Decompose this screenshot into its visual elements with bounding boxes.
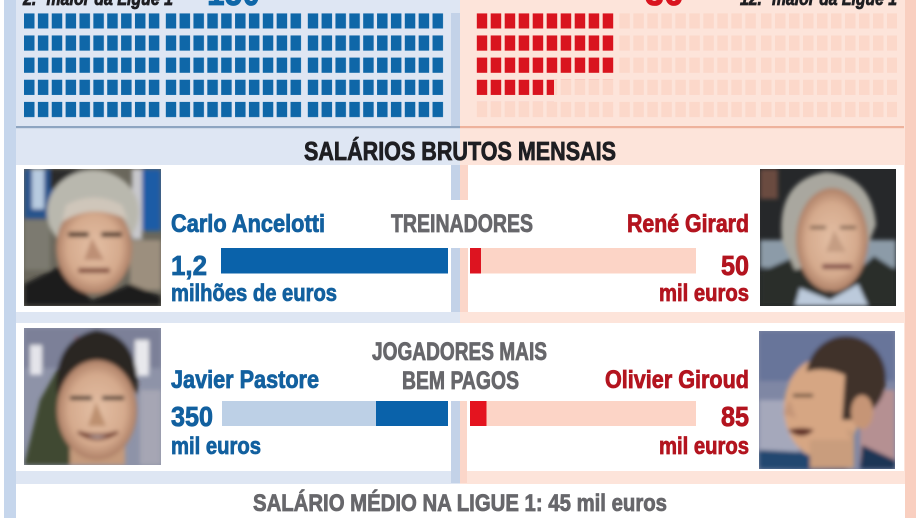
unit chart: left team, all squares filled: [24, 13, 445, 124]
category label: coaches: TREINADORES: [391, 210, 533, 238]
right player salary unit: mil euros: [659, 433, 749, 460]
photo: Olivier Giroud: [759, 331, 895, 470]
right coach name: René Girard: [627, 210, 749, 238]
section heading: SALÁRIOS BRUTOS MENSAIS: [304, 136, 616, 166]
right player salary value: 85: [721, 401, 749, 432]
category label: best-paid players: BEM PAGOS: [402, 367, 519, 395]
photo: Carlo Ancelotti: [24, 169, 161, 306]
right player bar: [470, 401, 696, 426]
right player name: Olivier Giroud: [605, 366, 749, 394]
left coach bar: [221, 248, 448, 274]
left coach salary unit: milhões de euros: [171, 280, 337, 307]
right coach bar: [470, 248, 696, 274]
left player name: Javier Pastore: [171, 366, 319, 394]
player comparison: [171, 338, 749, 460]
white panel: coaches: [16, 165, 904, 312]
category label: best-paid players: JOGADORES MAIS: [372, 338, 547, 366]
photo: René Girard: [760, 169, 896, 306]
right coach salary unit: mil euros: [659, 280, 749, 307]
coach comparison: [171, 210, 749, 307]
left player salary unit: mil euros: [171, 433, 261, 460]
right coach salary value: 50: [721, 250, 749, 281]
white panel: average salary: [16, 484, 905, 518]
left coach name: Carlo Ancelotti: [171, 210, 325, 238]
white panel: best-paid players: [16, 323, 904, 471]
average salary line: SALÁRIO MÉDIO NA LIGUE 1: 45 mil euros: [253, 489, 667, 517]
left coach salary value: 1,2: [171, 250, 207, 281]
left player salary value: 350: [171, 401, 213, 432]
unit chart: right team, partially filled squares: [477, 13, 897, 124]
left player bar: [222, 401, 448, 426]
photo: Javier Pastore: [24, 328, 161, 465]
